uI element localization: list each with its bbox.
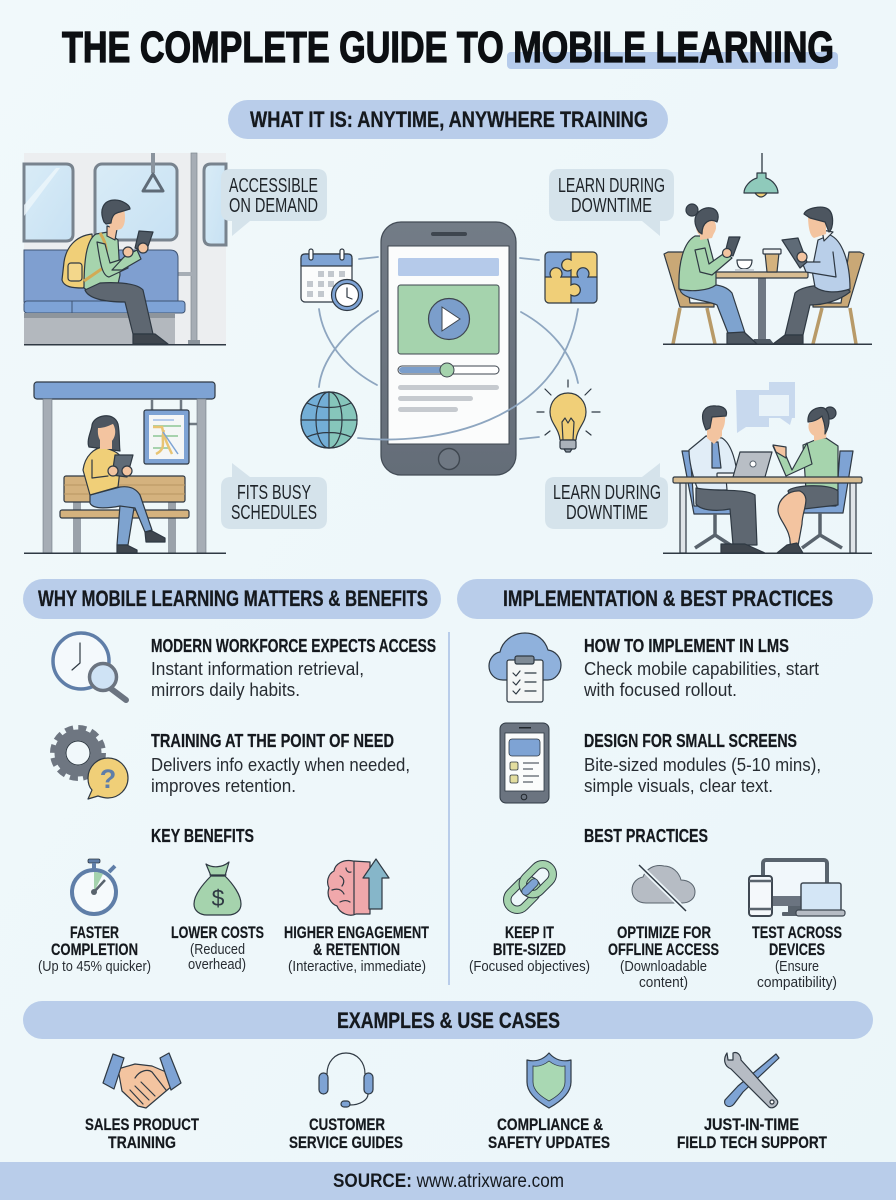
- callout: learn during downtime bottom: [545, 463, 668, 529]
- icon: money bag: [194, 862, 241, 915]
- illustration: office meeting: [663, 382, 872, 554]
- footer source bar: [0, 1162, 896, 1200]
- icon: wrench and screwdriver: [725, 1053, 779, 1108]
- icon: lightbulb: [537, 380, 600, 452]
- icon: clock with magnifier: [53, 633, 126, 700]
- text: how to implement in lms: with focused rollout.: [583, 679, 737, 700]
- benefit: lower costs: (Reduced: [190, 941, 245, 958]
- backpack: [62, 234, 95, 288]
- benefit: optimize for offline access: OFFLINE ACCESS: [608, 941, 719, 959]
- benefit: optimize for offline access: OPTIMIZE FOR: [617, 924, 711, 942]
- callout: learn during downtime top: [549, 169, 674, 236]
- use case: customer service guides: [289, 1116, 403, 1152]
- icon: globe: [301, 392, 357, 448]
- heading: examples and use cases: EXAMPLES & USE CASES: [337, 1008, 560, 1033]
- use case: field tech support: FIELD TECH SUPPORT: [677, 1134, 827, 1152]
- benefit: keep it bite-sized: KEEP IT: [505, 924, 554, 942]
- benefit: test across devices: DEVICES: [769, 941, 825, 959]
- benefit: lower costs: [171, 924, 264, 973]
- text: training at the point of need: Delivers info exactly when needed,: [151, 754, 410, 775]
- benefit: faster completion: [38, 924, 151, 975]
- text: design for small screens: simple visuals, clear text.: [584, 775, 773, 796]
- benefit: faster completion: (Up to 45% quicker): [38, 958, 151, 975]
- benefit: faster completion: COMPLETION: [51, 941, 138, 959]
- illustration: person at bus stop: [24, 382, 226, 554]
- heading: examples and use cases: [23, 1001, 873, 1039]
- use case: sales product training: [85, 1116, 199, 1152]
- text: training at the point of need: TRAINING AT THE POINT OF NEED: [151, 730, 394, 751]
- footer source bar: SOURCE: www.atrixware.com: [333, 1171, 564, 1192]
- icon: gear and question bubble: ?: [100, 764, 116, 794]
- icon: handshake: [103, 1053, 181, 1108]
- icon: money bag: $: [212, 885, 225, 911]
- callout: learn during downtime bottom: DOWNTIME: [566, 502, 648, 524]
- benefit: lower costs: LOWER COSTS: [171, 924, 264, 942]
- phone mockup: [381, 222, 516, 475]
- use case: customer service guides: SERVICE GUIDES: [289, 1134, 403, 1152]
- benefit: test across devices: (Ensure: [775, 958, 819, 975]
- benefit: keep it bite-sized: BITE-SIZED: [493, 941, 566, 959]
- icon: shield: [527, 1053, 571, 1108]
- callout: fits busy schedules: [221, 463, 327, 529]
- callout: accessible on demand: [221, 169, 327, 236]
- heading: what it is: WHAT IT IS: ANYTIME, ANYWHERE TRAINING: [250, 107, 648, 132]
- heading: why mobile learning matters: [23, 579, 441, 619]
- benefit: keep it bite-sized: (Focused objectives): [469, 958, 590, 975]
- text: training at the point of need: [151, 730, 410, 796]
- text: how to implement in lms: HOW TO IMPLEMENT IN LMS: [584, 635, 789, 656]
- benefit: higher engagement: HIGHER ENGAGEMENT: [284, 924, 429, 942]
- use case: sales product training: TRAINING: [108, 1134, 176, 1152]
- use case: compliance and safety: SAFETY UPDATES: [488, 1134, 610, 1152]
- callout: learn during downtime top: LEARN DURING: [558, 175, 665, 197]
- callout: learn during downtime bottom: LEARN DURING: [553, 482, 661, 504]
- laptop: [733, 452, 772, 477]
- woman in cafe: [680, 285, 745, 333]
- benefit: keep it bite-sized: [469, 924, 590, 975]
- woman in meeting: [803, 438, 838, 490]
- benefit: higher engagement: (Interactive, immediate): [288, 958, 426, 975]
- benefit: optimize for offline access: content): [639, 974, 688, 991]
- benefit: test across devices: compatibility): [757, 974, 837, 991]
- callout: accessible on demand: ON DEMAND: [229, 195, 318, 217]
- benefit: faster completion: FASTER: [70, 924, 119, 942]
- icon: chain link: [503, 860, 557, 914]
- icon: multiple devices: [749, 860, 845, 916]
- use case: compliance and safety: COMPLIANCE &: [497, 1116, 603, 1134]
- icon: phone with layout: [500, 723, 549, 803]
- text: modern workforce expects access: [151, 635, 436, 700]
- heading: what it is: [228, 100, 668, 139]
- icon: offline cloud: [632, 865, 695, 912]
- use case: compliance and safety: [488, 1116, 610, 1152]
- benefit: lower costs: overhead): [188, 956, 246, 973]
- callout: fits busy schedules: SCHEDULES: [231, 502, 317, 524]
- heading: why mobile learning matters: WHY MOBILE LEARNING MATTERS & BENEFITS: [38, 586, 428, 611]
- connector arc: globe to puzzle: [358, 309, 578, 440]
- benefit: test across devices: TEST ACROSS: [752, 924, 842, 942]
- text: design for small screens: Bite-sized modules (5-10 mins),: [584, 754, 821, 775]
- callout: accessible on demand: ACCESSIBLE: [229, 175, 318, 197]
- benefit: optimize for offline access: (Downloadable: [620, 958, 707, 975]
- icon: calendar: [301, 249, 362, 310]
- man in cafe: [785, 285, 850, 335]
- use case: customer service guides: CUSTOMER: [309, 1116, 385, 1134]
- illustration: commuter on train: [24, 153, 226, 346]
- benefit: higher engagement: & RETENTION: [313, 941, 400, 959]
- icon: brain with arrow: [328, 859, 389, 915]
- use case: sales product training: SALES PRODUCT: [85, 1116, 199, 1134]
- icon: headset: [319, 1053, 373, 1107]
- icon: gear and question bubble: [53, 728, 128, 799]
- icon: cloud with clipboard: [489, 633, 561, 702]
- text: how to implement in lms: Check mobile capabilities, start: [584, 658, 819, 679]
- use case: field tech support: [677, 1116, 827, 1152]
- benefit: test across devices: [752, 924, 842, 991]
- text: modern workforce expects access: MODERN WORKFORCE EXPECTS ACCESS: [151, 635, 436, 656]
- heading: key benefits: KEY BENEFITS: [151, 825, 254, 846]
- text: design for small screens: [584, 730, 821, 796]
- text: how to implement in lms: [583, 635, 819, 700]
- text: modern workforce expects access: mirrors daily habits.: [151, 679, 300, 700]
- callout: fits busy schedules: FITS BUSY: [237, 482, 311, 504]
- text: modern workforce expects access: Instant information retrieval,: [151, 658, 364, 679]
- benefit: higher engagement: [284, 924, 429, 975]
- text: design for small screens: DESIGN FOR SMALL SCREENS: [584, 730, 797, 751]
- text: training at the point of need: improves retention.: [151, 775, 296, 796]
- man in meeting: [689, 436, 737, 490]
- illustration: cafe learners: [663, 153, 872, 345]
- heading: implementation and best practices: [457, 579, 873, 619]
- benefit: optimize for offline access: [608, 924, 719, 991]
- use case: field tech support: JUST-IN-TIME: [704, 1116, 799, 1134]
- callout: learn during downtime top: DOWNTIME: [571, 195, 652, 217]
- connector lines: [319, 257, 578, 439]
- heading: best practices: BEST PRACTICES: [584, 825, 708, 846]
- icon: puzzle: [545, 252, 597, 303]
- icon: stopwatch: [72, 859, 116, 914]
